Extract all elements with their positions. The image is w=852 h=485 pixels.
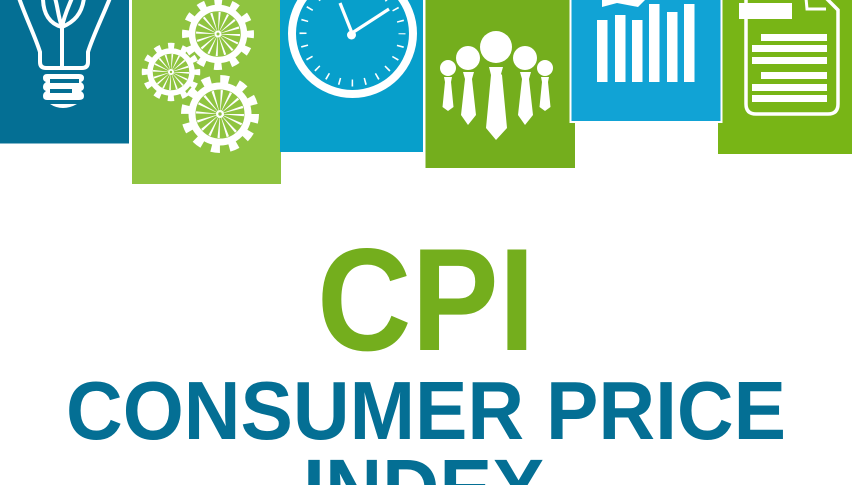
heading: CPI: CPI bbox=[317, 218, 535, 381]
icon: light bulb bbox=[19, 0, 110, 108]
icon: clock bbox=[292, 0, 413, 94]
heading: consumer price: CONSUMER PRICE bbox=[66, 364, 786, 457]
icon: bar chart bbox=[597, 0, 694, 82]
panel: people with ties bbox=[426, 0, 575, 168]
panel: bar chart bbox=[570, 0, 722, 122]
icon: document bbox=[739, 0, 838, 114]
icon: people with ties bbox=[440, 31, 553, 140]
panel: document bbox=[718, 0, 852, 154]
icon: small gear bbox=[146, 46, 196, 98]
panel: light bulb bbox=[0, 0, 129, 144]
icon: top gear bbox=[186, 2, 250, 66]
icon: large gear bbox=[186, 80, 254, 148]
panel: clock bbox=[280, 0, 423, 152]
panel: gears bbox=[132, 0, 281, 184]
